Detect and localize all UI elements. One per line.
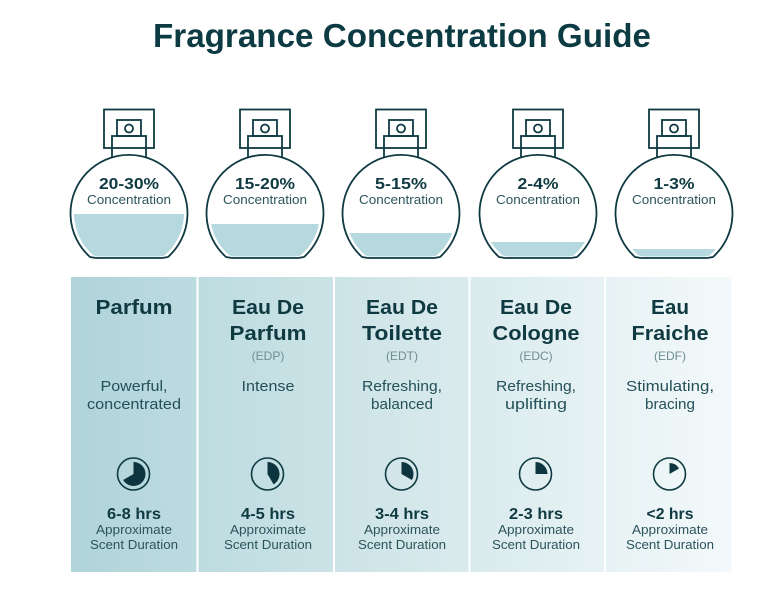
panel: eau de toilette: balanced: [371, 396, 433, 413]
panel: parfum: Approximate: [96, 522, 172, 537]
icon: clock 2-3 hrs: [520, 458, 552, 490]
panel: eau de parfum: Scent Duration: [224, 537, 312, 552]
panel: eau fraiche: Stimulating,: [626, 378, 714, 395]
bottle: eau de parfum 15-20%: Concentration: [223, 192, 307, 207]
bottle: eau de toilette 5-15%: Concentration: [359, 192, 443, 207]
panel: eau de cologne: Scent Duration: [492, 537, 580, 552]
panel: eau fraiche: bracing: [645, 396, 695, 413]
panel: eau de cologne: uplifting: [505, 396, 567, 413]
bottle: eau de toilette 5-15%: 5-15%: [375, 176, 427, 193]
panel: parfum: concentrated: [87, 396, 181, 413]
panel: eau de parfum: (EDP): [252, 349, 284, 363]
panel: eau de cologne: Eau De: [500, 296, 572, 319]
panel: parfum: Scent Duration: [90, 537, 178, 552]
panel: parfum: 6-8 hrs: [107, 506, 161, 523]
panel: eau fraiche: Eau: [651, 296, 689, 319]
panel: eau fraiche: Approximate: [632, 522, 708, 537]
panel: eau de toilette: Toilette: [362, 322, 442, 345]
bottle: eau de cologne 2-4%: 2-4%: [518, 176, 559, 193]
bottle: parfum 20-30%: 20-30%: [99, 176, 159, 193]
title: Fragrance Concentration Guide: [153, 17, 651, 54]
panel: eau de cologne: Refreshing,: [496, 378, 576, 395]
panel: eau de toilette: Approximate: [364, 522, 440, 537]
panel: eau de cologne: 2-3 hrs: [509, 506, 563, 523]
panel: eau de cologne: [470, 277, 604, 572]
panel: eau de toilette: 3-4 hrs: [375, 506, 429, 523]
panel: eau de toilette: Refreshing,: [362, 378, 442, 395]
icon: clock 4-5 hrs: [252, 458, 284, 490]
panel: eau de toilette: Eau De: [366, 296, 438, 319]
panel: eau de parfum: Parfum: [230, 322, 306, 345]
panel: eau fraiche: Fraiche: [632, 322, 708, 345]
icon: clock 3-4 hrs: [386, 458, 418, 490]
panel: parfum: Parfum: [96, 296, 172, 319]
bottle: eau de cologne 2-4%: Concentration: [496, 192, 580, 207]
bottle: parfum 20-30%: Concentration: [87, 192, 171, 207]
panel: eau de parfum: 4-5 hrs: [241, 506, 295, 523]
bottle: eau de parfum 15-20%: [205, 110, 325, 258]
panel: eau de cologne: (EDC): [519, 349, 553, 363]
panel: parfum: Powerful,: [100, 378, 168, 395]
panel: eau fraiche: [606, 277, 732, 572]
panel: eau de cologne: Cologne: [492, 322, 580, 345]
panel: parfum: [71, 277, 196, 572]
panel: eau fraiche: <2 hrs: [646, 506, 694, 523]
panel: eau de toilette: [335, 277, 468, 572]
panel: eau fraiche: (EDF): [654, 349, 686, 363]
panel: eau de toilette: (EDT): [386, 349, 418, 363]
panel: eau de cologne: Approximate: [498, 522, 574, 537]
bottle: eau de parfum 15-20%: 15-20%: [235, 176, 295, 193]
panel: eau de parfum: Intense: [242, 378, 294, 395]
panel: eau de parfum: Approximate: [230, 522, 306, 537]
bottle: eau de cologne 2-4%: [478, 110, 598, 258]
icon: clock under 2 hrs: [654, 458, 686, 490]
panel: eau de parfum: Eau De: [232, 296, 304, 319]
bottle: eau fraiche 1-3%: Concentration: [632, 192, 716, 207]
panel: eau de parfum: [198, 277, 333, 572]
bottle: eau de toilette 5-15%: [341, 110, 461, 258]
bottle: eau fraiche 1-3%: 1-3%: [654, 176, 695, 193]
bottle: eau fraiche 1-3%: [614, 110, 734, 258]
panel: eau de toilette: Scent Duration: [358, 537, 446, 552]
panel: eau fraiche: Scent Duration: [626, 537, 714, 552]
icon: clock 6-8 hrs: [118, 458, 150, 490]
bottle: parfum 20-30%: [69, 110, 189, 258]
